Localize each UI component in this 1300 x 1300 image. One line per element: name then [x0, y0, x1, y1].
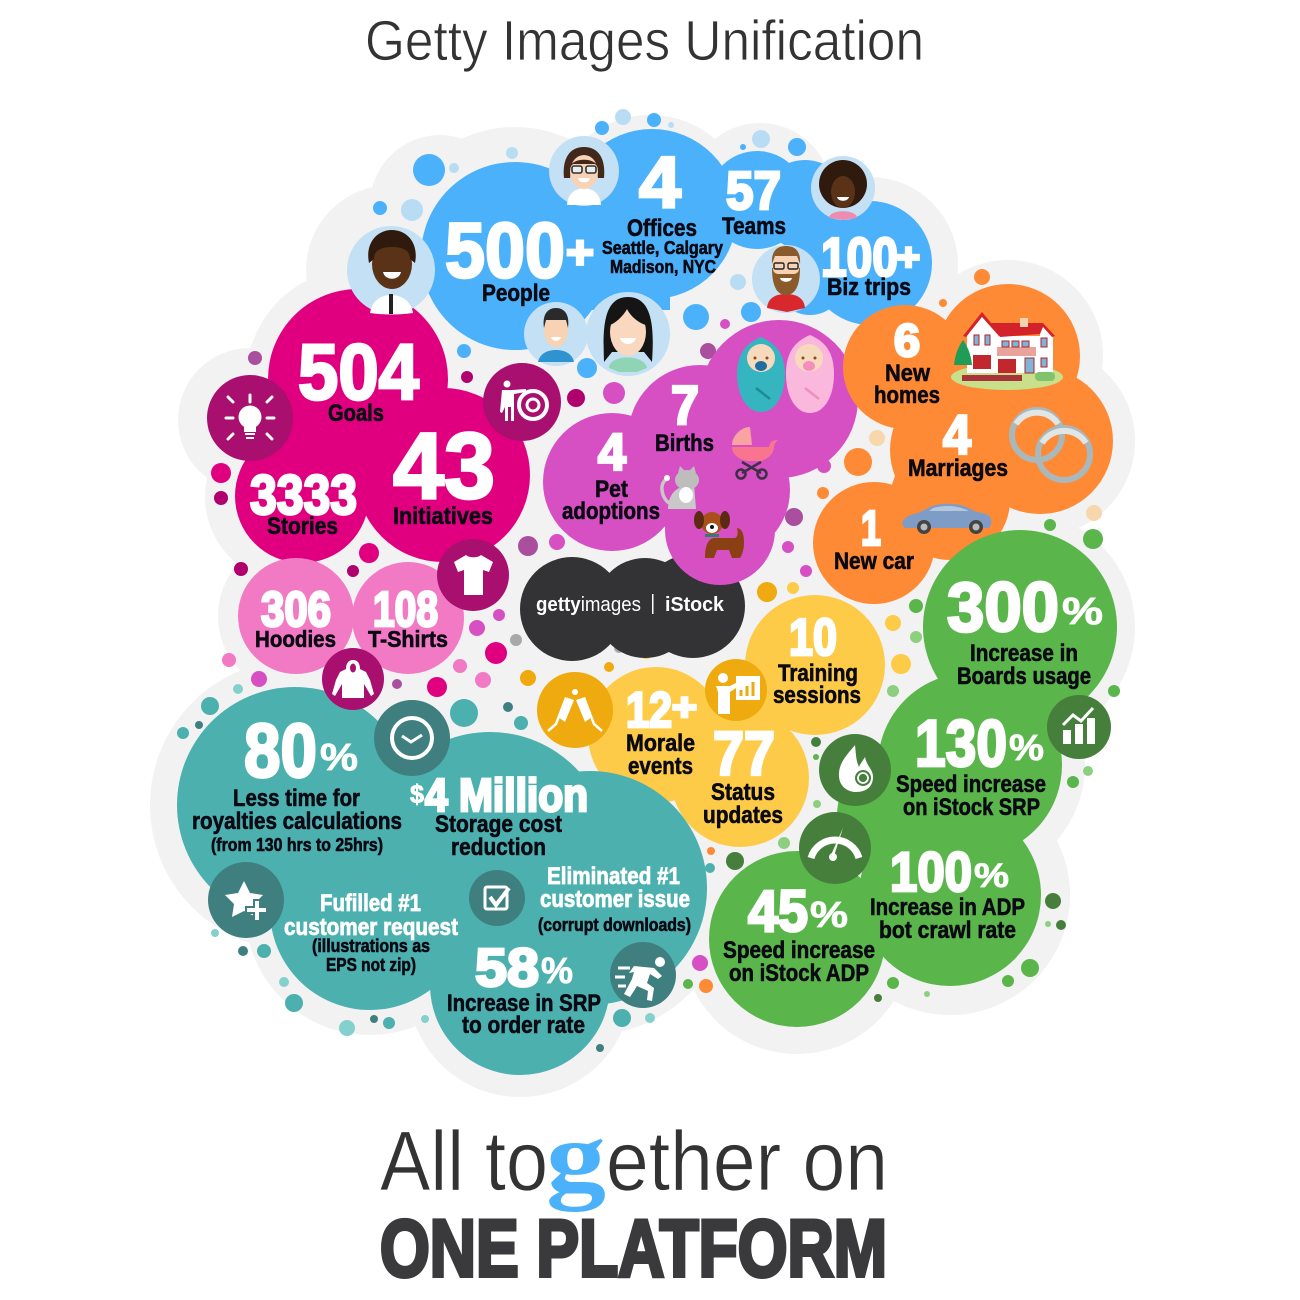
stat: 80% royalties: Less time for	[233, 785, 360, 812]
stat: 130% speed srp: %	[1009, 727, 1044, 768]
stat: $4 million: 4 Million	[425, 769, 588, 821]
stat: $4 million: reduction	[451, 834, 546, 861]
stat: fulfilled customer request: Fufilled #1	[320, 890, 421, 917]
stat: 80% royalties	[192, 709, 402, 855]
icon: cat	[662, 466, 699, 509]
stat: 12+ morale events: events	[628, 753, 693, 780]
panel: goals (magenta)	[207, 226, 561, 563]
stat: 100% adp bot crawl: Increase in ADP	[870, 894, 1025, 921]
stat: 130% speed srp	[896, 706, 1046, 821]
stat: 4 pet adoptions: adoptions	[562, 498, 660, 525]
icon: light bulb	[207, 375, 293, 461]
stat: 4 offices: Offices	[627, 215, 697, 242]
panel: getty logo	[520, 554, 745, 661]
stat: 4 pet adoptions: 4	[598, 424, 626, 482]
stat: fulfilled customer request: customer request	[284, 914, 458, 941]
stat: fulfilled customer request: EPS not zip)	[326, 955, 416, 975]
stat: 80% royalties: (from 130 hrs to 25hrs)	[211, 835, 383, 855]
stat: 77 status updates: Status	[711, 779, 775, 806]
stat: eliminated customer issue: (corrupt downloads)	[538, 915, 691, 935]
avatar: woman with afro	[811, 156, 875, 220]
tagline: all together on: ether on	[606, 1114, 888, 1208]
icon: stroller	[732, 427, 778, 478]
tagline: one platform: ONE PLATFORM	[380, 1204, 887, 1294]
icon: star plus	[208, 862, 284, 938]
stat: eliminated customer issue	[538, 863, 691, 935]
stat: 45% speed adp: on iStock ADP	[729, 960, 869, 987]
stat: 10 training sessions: sessions	[773, 682, 861, 709]
stat: 100+ biz trips: 100	[821, 226, 898, 288]
stat: 130% speed srp: Speed increase	[896, 771, 1046, 798]
tagline: all together on: g	[546, 1101, 606, 1212]
stat: 1 new car	[834, 502, 914, 575]
icon: babies	[737, 335, 834, 413]
stat: 12+ morale events: Morale	[626, 730, 695, 757]
stat: 500+ people: +	[566, 226, 594, 278]
stat: 4 offices	[602, 143, 723, 277]
stat: 12+ morale events: +	[672, 687, 697, 729]
stat: 130% speed srp: on iStock SRP	[903, 794, 1040, 821]
decorative dots	[177, 109, 1120, 1052]
stat: 306 hoodies	[255, 583, 336, 652]
panel: milestones (orange)	[813, 284, 1113, 604]
stat: 58% srp to order: %	[541, 950, 573, 991]
stat: 300% boards usage: 300	[947, 568, 1059, 646]
stat: 4 pet adoptions: Pet	[595, 476, 628, 503]
avatar: woman with black hair	[586, 292, 670, 376]
stat: 45% speed adp: %	[810, 894, 848, 935]
stat: 12+ morale events: 12	[626, 682, 672, 738]
panel: business results (teal)	[177, 687, 707, 1075]
avatar: man in blue shirt	[524, 302, 588, 366]
stat: 58% srp to order: 58	[475, 938, 539, 998]
stat: 10 training sessions	[773, 609, 861, 709]
stat: 57 teams: Teams	[722, 213, 786, 240]
stat: 306 hoodies: 306	[261, 583, 331, 637]
stat: 57 teams: 57	[726, 161, 781, 221]
stat: 500+ people: People	[482, 280, 550, 307]
stat: $4 million: Storage cost	[435, 811, 562, 838]
stat: 300% boards usage: %	[1062, 591, 1103, 633]
stat: 80% royalties: %	[320, 737, 358, 779]
stat: 4 marriages: Marriages	[908, 455, 1008, 482]
stat: 77 status updates: updates	[703, 802, 783, 829]
stat: 300% boards usage	[947, 568, 1103, 690]
stat: 306 hoodies: Hoodies	[255, 626, 336, 652]
stat: 504 goals: 504	[298, 327, 419, 416]
avatar: bearded man	[752, 245, 820, 313]
icon: presenter	[705, 659, 767, 721]
stat: 45% speed adp: 45	[748, 879, 808, 944]
stat: 80% royalties: royalties calculations	[192, 808, 402, 835]
panel: getty logo: gettyimages	[536, 594, 641, 616]
icon: runner	[610, 942, 676, 1008]
stat: 100% adp bot crawl	[870, 840, 1025, 944]
icon: speedometer	[799, 812, 871, 884]
stat: 10 training sessions: Training	[778, 660, 858, 687]
man avatar above magenta	[347, 226, 435, 314]
title: Getty Images Unification	[365, 9, 924, 73]
stat: 80% royalties: 80	[244, 709, 317, 794]
stat: 45% speed adp	[723, 879, 875, 987]
stat: 77 status updates	[703, 720, 783, 829]
stat: 1 new car: New car	[834, 548, 914, 575]
stat: 300% boards usage: Boards usage	[957, 663, 1091, 690]
stat: eliminated customer issue: customer issue	[540, 886, 690, 913]
stat: 58% srp to order: to order rate	[462, 1012, 585, 1039]
stat: 3333 stories: 3333	[250, 463, 357, 526]
icon: growth chart	[1047, 695, 1111, 759]
panel: performance (green)	[709, 530, 1117, 1027]
stat: 7 births: Births	[655, 430, 714, 457]
stat: 7 births	[655, 374, 714, 457]
stat: 100+ biz trips: +	[897, 237, 920, 279]
stat: eliminated customer issue: Eliminated #1	[547, 863, 680, 890]
stat: 504 goals: Goals	[328, 400, 384, 427]
icon: hoodie	[322, 648, 384, 710]
stat: $4 million: $	[410, 779, 425, 809]
stat: 108 t-shirts: 108	[373, 583, 438, 637]
stat: 6 new homes: 6	[894, 315, 920, 366]
icon: target	[483, 363, 561, 441]
panel: events (yellow)	[537, 595, 885, 847]
stat: 130% speed srp: 130	[915, 706, 1007, 780]
tagline: all together on: All to	[380, 1114, 548, 1208]
stat: 45% speed adp: Speed increase	[723, 937, 875, 964]
stat: 43 initiatives: 43	[393, 413, 495, 518]
stat: 100% adp bot crawl: bot crawl rate	[879, 917, 1016, 944]
avatar: woman with glasses	[549, 136, 619, 206]
stat: 300% boards usage: Increase in	[970, 640, 1078, 667]
icon: car	[902, 504, 991, 534]
stat: 100% adp bot crawl: 100	[890, 840, 972, 903]
stat: 500+ people: 500	[445, 206, 565, 294]
stat: 3333 stories: Stories	[267, 513, 338, 540]
icon: wedding rings	[1012, 410, 1090, 480]
stat: 4 marriages: 4	[943, 403, 971, 466]
tagline: all together on	[380, 1101, 888, 1212]
icon: dog	[694, 511, 744, 558]
stat: 10 training sessions: 10	[789, 609, 837, 667]
icon: clock	[374, 700, 450, 776]
panel: apparel (pink)	[238, 539, 509, 710]
stat: 58% srp to order	[447, 938, 601, 1039]
stat: 1 new car: 1	[861, 502, 881, 556]
stat: 6 new homes: homes	[874, 382, 940, 409]
panel: getty logo: iStock	[665, 594, 725, 616]
background blob	[150, 115, 1135, 1097]
panel: family (purple)	[543, 320, 858, 585]
stat: 58% srp to order: Increase in SRP	[447, 990, 601, 1017]
stat: 4 offices: 4	[639, 143, 681, 223]
stat: 6 new homes: New	[885, 360, 930, 387]
stat: 4 marriages	[908, 403, 1008, 482]
stat: 7 births: 7	[671, 374, 699, 436]
stat: 108 t-shirts	[368, 583, 448, 652]
icon: champagne glasses	[537, 672, 613, 748]
stat: 6 new homes	[874, 315, 940, 409]
stat: 4 offices: Seattle, Calgary	[602, 238, 723, 258]
stat: 4 pet adoptions	[562, 424, 660, 525]
icon: house	[951, 312, 1063, 390]
stat: 108 t-shirts: T-Shirts	[368, 626, 448, 652]
stat: 12+ morale events	[626, 682, 697, 780]
stat: fulfilled customer request	[284, 890, 458, 975]
stat: 100% adp bot crawl: %	[974, 857, 1009, 895]
icon: flame speed	[819, 734, 891, 806]
stat: fulfilled customer request: (illustrations as	[312, 936, 430, 956]
stat: 4 offices: Madison, NYC	[610, 257, 716, 277]
icon: checkbox	[469, 870, 525, 926]
stat: 100+ biz trips: Biz trips	[827, 274, 911, 301]
stat: 77 status updates: 77	[713, 720, 775, 789]
icon: t-shirt	[437, 539, 509, 611]
panel: people (blue)	[421, 129, 932, 376]
stat: $4 million	[410, 769, 588, 861]
stat: 43 initiatives: Initiatives	[393, 503, 493, 530]
